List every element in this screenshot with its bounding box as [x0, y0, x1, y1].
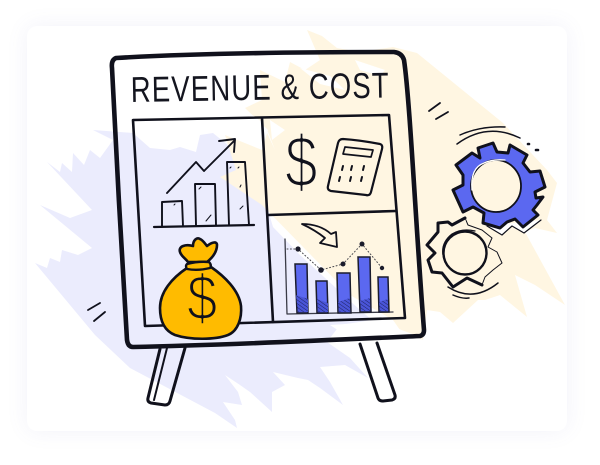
curved down arrow	[302, 224, 337, 247]
trend arrow	[167, 139, 235, 193]
gear thick edge	[427, 218, 482, 287]
trend points	[295, 242, 384, 273]
bars	[162, 162, 249, 226]
right leg	[360, 343, 395, 401]
brush stroke: cream	[220, 30, 565, 340]
bag dollar sign: $	[187, 262, 217, 334]
panel: dollar and calculator	[285, 122, 382, 204]
background card	[27, 26, 567, 431]
icon: money bag	[160, 238, 241, 339]
spark dots	[528, 144, 538, 150]
gear hole	[471, 160, 521, 212]
bag body	[160, 267, 241, 339]
gear thin edge	[465, 218, 502, 285]
bag tie	[186, 262, 211, 270]
chart baseline	[154, 225, 254, 227]
panel: rising bar chart	[154, 139, 254, 227]
rotation arcs: outline gear	[448, 283, 498, 298]
board frame	[112, 52, 424, 347]
gear hole	[444, 232, 486, 274]
panel grid	[133, 115, 405, 326]
brush stroke: lavender	[35, 130, 372, 428]
icon: outline gear	[427, 218, 502, 287]
panel: falling bar chart	[285, 224, 393, 314]
motion marks right	[429, 103, 448, 119]
bag knot	[180, 238, 217, 262]
title: REVENUE & COST	[130, 64, 390, 110]
rotation arcs: blue gear	[457, 127, 520, 144]
easel legs	[148, 343, 395, 405]
bars	[295, 257, 389, 313]
icon: calculator	[328, 139, 382, 195]
bar glints	[174, 167, 243, 221]
gear body	[453, 143, 545, 228]
left leg	[148, 348, 185, 405]
brush streaks: white	[245, 60, 415, 338]
icon: blue gear	[453, 143, 545, 235]
gear shadow line	[487, 220, 541, 235]
bar hatching	[296, 295, 388, 312]
motion marks left	[88, 303, 105, 321]
dollar sign: $	[285, 122, 317, 204]
gear highlight	[472, 160, 505, 190]
dotted trend line	[287, 244, 382, 270]
axes	[285, 239, 393, 314]
